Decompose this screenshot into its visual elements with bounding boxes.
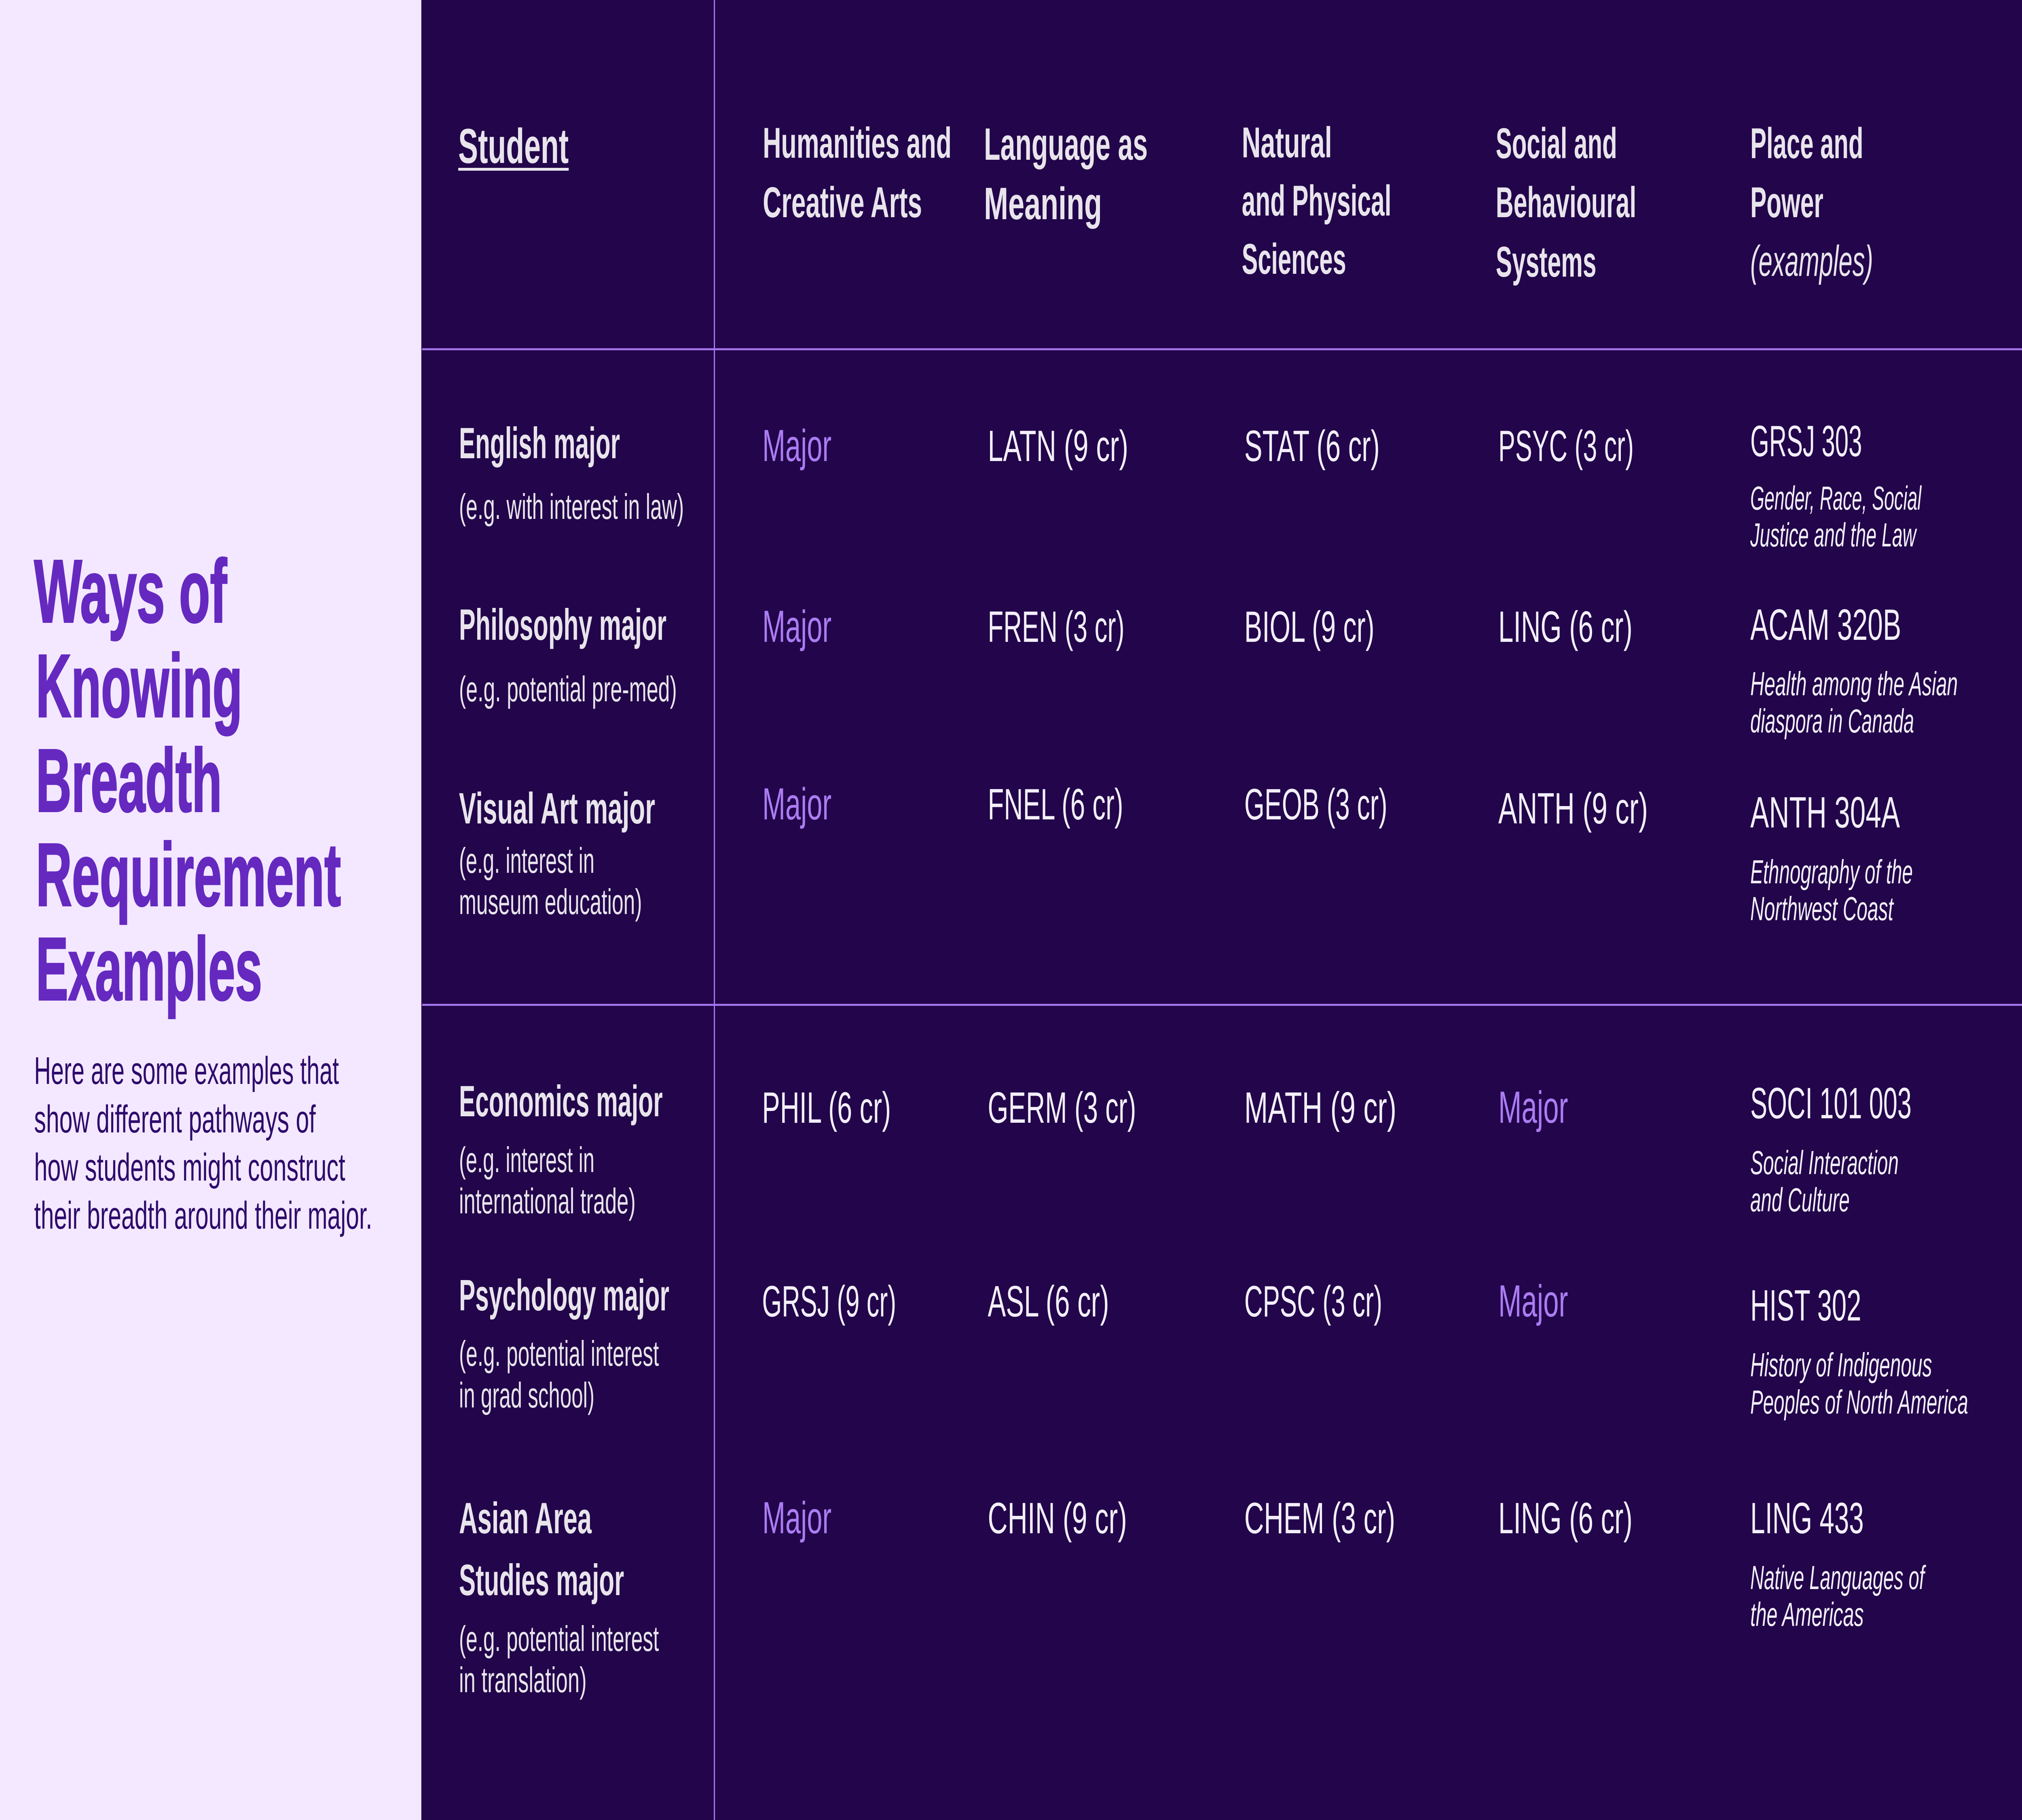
row: English major: English major: [459, 419, 620, 468]
title: Breadth: [36, 731, 222, 831]
row: Visual Art major: museum education): [459, 882, 642, 922]
row: Economics major: [459, 1077, 1912, 1221]
row: Visual Art major: GEOB (3 cr): [1244, 780, 1387, 829]
header: Humanities and Creative Arts: Humanities and: [763, 119, 952, 167]
row: Psychology major: HIST 302: [1750, 1281, 1861, 1330]
row: Asian Area Studies major: the Americas: [1750, 1595, 1864, 1633]
header: Student: Student: [458, 119, 569, 174]
row: Economics major: GERM (3 cr): [988, 1084, 1136, 1132]
row: Asian Area Studies major: Native Languages of: [1750, 1558, 1926, 1596]
header: Language as Meaning: Meaning: [984, 178, 1102, 229]
header: Social and Behavioural Systems: Behavioural: [1496, 178, 1636, 226]
row: Economics major: and Culture: [1750, 1181, 1850, 1219]
row: Visual Art major: Visual Art major: [459, 784, 655, 833]
row: Visual Art major: [459, 779, 1913, 927]
row: Philosophy major: FREN (3 cr): [988, 603, 1125, 652]
row: Asian Area Studies major: CHIN (9 cr): [988, 1494, 1127, 1543]
header: Language as Meaning: Language as: [984, 119, 1148, 169]
row: Asian Area Studies major: CHEM (3 cr): [1244, 1494, 1395, 1543]
header: Humanities and Creative Arts: [763, 119, 952, 226]
row: Asian Area Studies major: [459, 1492, 1926, 1700]
row: Asian Area Studies major: LING (6 cr): [1498, 1494, 1633, 1543]
row: Visual Art major: Northwest Coast: [1750, 889, 1894, 927]
header: Place and Power (examples): Place and: [1750, 119, 1863, 167]
intro paragraph: their breadth around their major.: [34, 1194, 372, 1237]
row: Philosophy major: Philosophy major: [459, 601, 666, 650]
row: Psychology major: (e.g. potential interest: [459, 1334, 659, 1373]
row: English major: Major: [762, 420, 831, 471]
row: Psychology major: ASL (6 cr): [988, 1277, 1109, 1326]
row: Philosophy major: diaspora in Canada: [1750, 702, 1914, 740]
row: Philosophy major: [459, 601, 1958, 740]
row: Psychology major: Peoples of North America: [1750, 1383, 1968, 1421]
row: Economics major: Social Interaction: [1750, 1143, 1899, 1181]
row: Asian Area Studies major: Asian Area: [459, 1494, 592, 1543]
header: Natural and Physical Sciences: [1242, 118, 1392, 283]
row: Economics major: Major: [1498, 1082, 1568, 1132]
row: English major: [459, 417, 1922, 554]
row: Philosophy major: (e.g. potential pre-med): [459, 669, 677, 709]
row: English major: Justice and the Law: [1750, 516, 1917, 554]
row: Psychology major: Major: [1498, 1276, 1568, 1326]
row: English major: PSYC (3 cr): [1498, 422, 1634, 471]
row: Asian Area Studies major: Major: [762, 1492, 831, 1543]
title: [34, 542, 341, 1019]
intro paragraph: show different pathways of: [34, 1098, 316, 1141]
title: Ways of: [34, 542, 227, 641]
row: English major: LATN (9 cr): [988, 422, 1128, 471]
row: Visual Art major: FNEL (6 cr): [988, 780, 1123, 829]
header: Natural and Physical Sciences: and Physical: [1242, 176, 1392, 225]
row: Asian Area Studies major: Studies major: [459, 1556, 624, 1605]
row: Visual Art major: Major: [762, 779, 831, 829]
row: Philosophy major: ACAM 320B: [1750, 601, 1901, 650]
row: English major: (e.g. with interest in law): [459, 487, 684, 527]
header: Social and Behavioural Systems: Systems: [1496, 237, 1597, 286]
left panel background: [0, 0, 421, 1820]
row: English major: GRSJ 303: [1750, 417, 1862, 466]
intro paragraph: [34, 1049, 372, 1237]
row: Psychology major: in grad school): [459, 1376, 594, 1415]
header: Language as Meaning: [984, 119, 1148, 229]
row: Philosophy major: Major: [762, 601, 831, 652]
header: Natural and Physical Sciences: Sciences: [1242, 235, 1346, 283]
row: Economics major: MATH (9 cr): [1244, 1084, 1396, 1132]
row: Asian Area Studies major: in translation): [459, 1660, 587, 1700]
row: Psychology major: History of Indigenous: [1750, 1346, 1932, 1384]
intro paragraph: Here are some examples that: [34, 1049, 339, 1092]
row: Asian Area Studies major: LING 433: [1750, 1494, 1864, 1543]
header: Place and Power (examples): Power: [1750, 178, 1823, 226]
row: Economics major: Economics major: [459, 1077, 663, 1126]
row: Economics major: (e.g. interest in: [459, 1140, 594, 1180]
row: English major: STAT (6 cr): [1244, 422, 1380, 471]
row: Economics major: PHIL (6 cr): [762, 1084, 891, 1132]
row: Visual Art major: (e.g. interest in: [459, 841, 594, 880]
row: Economics major: international trade): [459, 1181, 636, 1221]
title: Requirement: [36, 825, 341, 925]
row: Philosophy major: LING (6 cr): [1498, 603, 1633, 652]
header: Humanities and Creative Arts: Creative Arts: [763, 178, 922, 226]
row: Psychology major: [459, 1271, 1968, 1421]
row: Philosophy major: Health among the Asian: [1750, 665, 1958, 703]
row: Asian Area Studies major: (e.g. potential interest: [459, 1619, 659, 1659]
row: Psychology major: GRSJ (9 cr): [762, 1277, 896, 1326]
row: Philosophy major: BIOL (9 cr): [1244, 603, 1375, 652]
row: Economics major: SOCI 101 003: [1750, 1079, 1912, 1128]
row: Visual Art major: Ethnography of the: [1750, 853, 1913, 891]
header: Place and Power (examples): (examples): [1750, 237, 1873, 285]
row: Visual Art major: ANTH (9 cr): [1498, 784, 1648, 833]
header: Social and Behavioural Systems: Social and: [1496, 119, 1617, 167]
header: Natural and Physical Sciences: Natural: [1242, 118, 1332, 167]
row: Visual Art major: ANTH 304A: [1750, 788, 1900, 837]
row: Psychology major: Psychology major: [459, 1271, 669, 1320]
header: Social and Behavioural Systems: [1496, 119, 1636, 286]
header: Place and Power (examples): [1750, 119, 1873, 285]
row: English major: Gender, Race, Social: [1750, 479, 1922, 517]
row: Psychology major: CPSC (3 cr): [1244, 1277, 1382, 1326]
title: Examples: [36, 919, 262, 1019]
intro paragraph: how students might construct: [34, 1146, 345, 1189]
title: Knowing: [36, 636, 242, 736]
